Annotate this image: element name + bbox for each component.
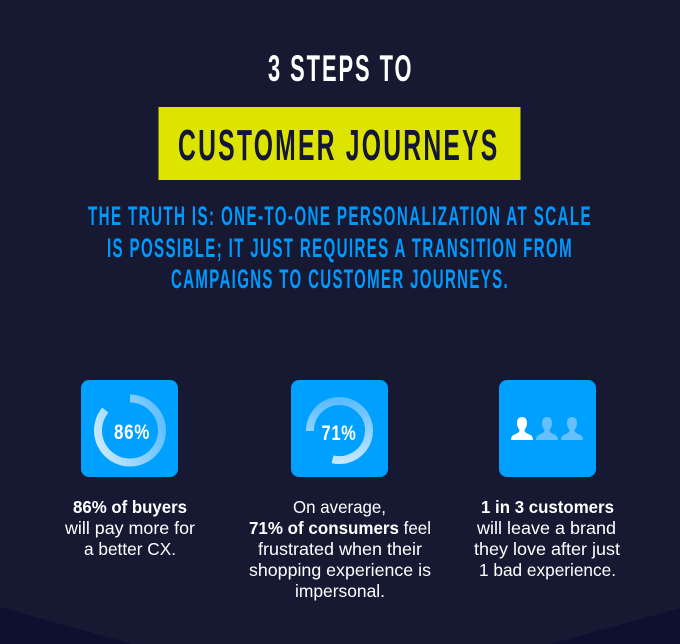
- stat 3 text: will leave a brand: [476, 518, 616, 538]
- stat 2 icon: 71% ring: [291, 380, 388, 477]
- intro text: [88, 201, 592, 294]
- icon: person muted: [536, 417, 558, 440]
- stat 2 text: frustrated when their: [258, 539, 422, 559]
- stat 3 text: they love after just: [474, 539, 620, 559]
- stat 1 icon: 86% ring: [81, 380, 178, 477]
- stat 2 icon: 71% ring: 71%: [322, 422, 356, 445]
- stat 3 text: [474, 497, 620, 580]
- stat 1 text: will pay more for: [64, 518, 195, 538]
- stat 2 text: On average,: [293, 497, 386, 517]
- stat 2 text: impersonal.: [295, 581, 385, 601]
- title line: 3 STEPS TO: [268, 48, 414, 89]
- stat 3 text: 1 bad experience.: [479, 560, 616, 580]
- stat 2 text: 71% of consumers feel: [249, 518, 431, 538]
- background corner: left: [0, 607, 132, 644]
- stat 2 text: [249, 497, 431, 601]
- title banner: [158, 107, 520, 180]
- stat 3 icon: people: [499, 380, 596, 477]
- stat 1 icon: 86% ring: 86%: [114, 421, 150, 444]
- icon: person highlighted: [511, 417, 533, 440]
- icon: person muted: [561, 417, 583, 440]
- stat 1 text: a better CX.: [84, 539, 176, 559]
- stat 2 text: shopping experience is: [249, 560, 431, 580]
- background corner: right: [551, 608, 680, 644]
- stat 3 text: 1 in 3 customers: [481, 497, 614, 517]
- stat 1 text: 86% of buyers: [73, 497, 187, 517]
- stat 1 text: [64, 497, 195, 559]
